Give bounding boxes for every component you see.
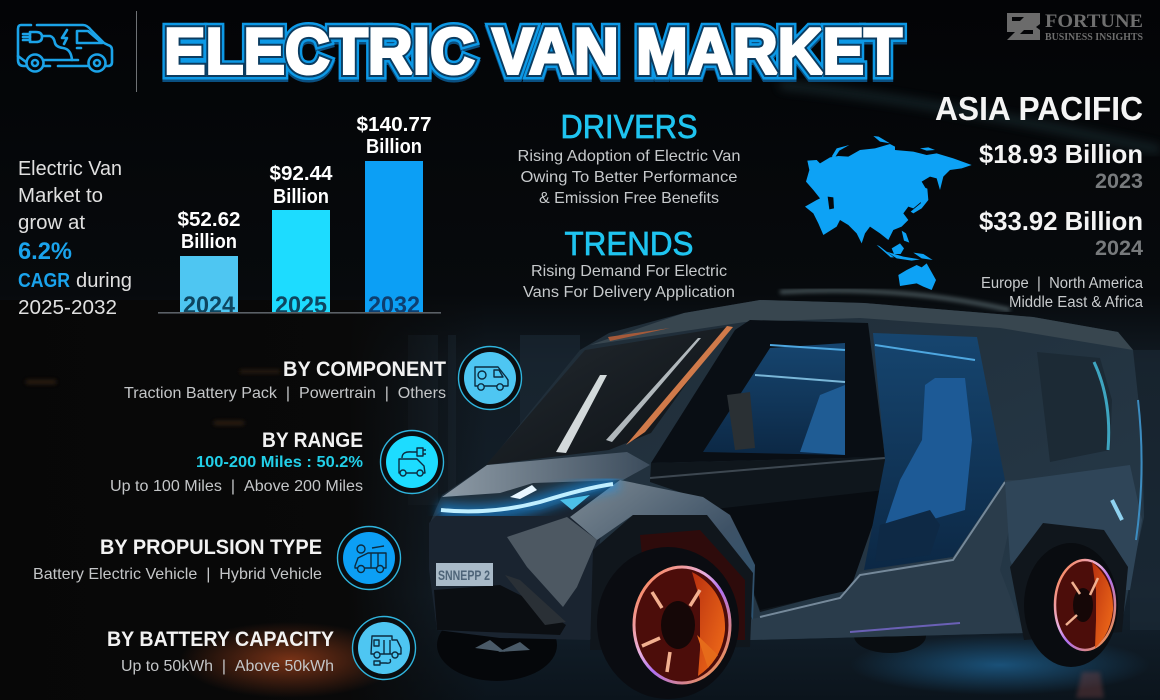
- van body: [429, 300, 1144, 640]
- text block: CAGR statement: grow at: [18, 212, 85, 234]
- title: ELECTRIC VAN MARKET: [164, 14, 902, 88]
- rear wheel arch: [1010, 523, 1128, 640]
- icon: battery capacity van badge: [352, 616, 416, 680]
- text block: Asia Pacific values: Europe | North America: [981, 275, 1143, 292]
- text block: trends: Vans For Delivery Application: [523, 284, 735, 301]
- text block: Asia Pacific values: 2023: [1095, 170, 1143, 193]
- headlight strip: [438, 482, 618, 513]
- bar 2032: 2032: [368, 292, 420, 319]
- bar 2032: Billion: [366, 136, 422, 158]
- bar 2025: [270, 163, 333, 319]
- text block: Asia Pacific values: Middle East & Africa: [1009, 294, 1143, 311]
- text block: Asia Pacific values: ASIA PACIFIC: [935, 90, 1143, 127]
- segment: by component: BY COMPONENT: [283, 358, 446, 381]
- bar 2024: $52.62: [178, 209, 240, 231]
- text block: drivers: Owing To Better Performance: [520, 169, 738, 186]
- bar 2032: $140.77: [356, 114, 432, 136]
- text block: Asia Pacific values: $33.92 Billion: [979, 206, 1143, 236]
- title: ELECTRIC VAN MARKET: [164, 14, 902, 88]
- fender: [570, 480, 755, 620]
- segment: by propulsion type: BY PROPULSION TYPE: [100, 536, 322, 559]
- segment: by range: BY RANGE: [262, 429, 363, 452]
- logo: Fortune Business Insights: FORTUNE: [1045, 11, 1143, 32]
- icon: propulsion van badge: [338, 526, 400, 590]
- icon: range van plug badge: [380, 430, 444, 494]
- bar 2024: Billion: [181, 231, 237, 253]
- segment: by component: [124, 358, 446, 402]
- segment: by battery capacity: Up to 50kWh | Above 50kWh: [121, 658, 334, 675]
- rear lower panel: [1005, 465, 1142, 590]
- icon: electric van outline: [18, 25, 112, 72]
- floor reflection: [1076, 672, 1104, 698]
- bar 2024: [178, 209, 240, 319]
- text block: drivers: & Emission Free Benefits: [539, 190, 719, 207]
- icon: component van badge: [458, 346, 522, 410]
- text block: CAGR statement: Market to: [18, 185, 103, 207]
- bar 2025: $92.44: [270, 163, 333, 185]
- logo: Fortune Business Insights: [1007, 11, 1143, 43]
- bar 2024: 2024: [183, 292, 236, 319]
- text block: Asia Pacific values: $18.93 Billion: [979, 139, 1143, 169]
- lower grille: [434, 585, 566, 635]
- far-side wheels: [437, 609, 557, 681]
- text block: CAGR statement: during: [76, 270, 132, 292]
- segment: by propulsion type: [33, 536, 322, 583]
- text block: Asia Pacific values: [935, 90, 1143, 311]
- segment: by range: [110, 429, 363, 495]
- text block: trends: TRENDS: [564, 225, 694, 262]
- rear panel window: [1037, 352, 1112, 462]
- text block: CAGR statement: 6.2%: [18, 238, 72, 265]
- segment: by component: Traction Battery Pack | Powertrain | Others: [124, 385, 446, 402]
- side mirror: [727, 392, 755, 450]
- bar 2025: 2025: [275, 292, 327, 319]
- map: Asia Pacific: [805, 136, 972, 290]
- segment: by range: 100-200 Miles : 50.2%: [196, 454, 363, 471]
- logo: Fortune Business Insights: BUSINESS INSIGHTS: [1045, 32, 1143, 43]
- text block: drivers: Rising Adoption of Electric Van: [518, 148, 740, 165]
- text block: CAGR statement: 2025-2032: [18, 297, 117, 319]
- text block: trends: [523, 225, 735, 301]
- number plate: [436, 563, 493, 586]
- roof highlight: [590, 300, 1133, 350]
- text block: drivers: [518, 108, 740, 207]
- bar chart: market size: [158, 114, 441, 319]
- segment: by range: Up to 100 Miles | Above 200 Miles: [110, 478, 363, 495]
- text block: Asia Pacific values: 2024: [1095, 237, 1143, 260]
- segment: by propulsion type: Battery Electric Vehicle | Hybrid Vehicle: [33, 566, 322, 583]
- hood: [442, 452, 650, 497]
- title: ELECTRIC VAN MARKET: [164, 17, 902, 90]
- grey bumper panel: [507, 517, 597, 607]
- text block: CAGR statement: Electric Van: [18, 158, 122, 180]
- divider: [136, 11, 137, 92]
- windshield: [486, 327, 727, 465]
- segment: by battery capacity: [107, 628, 334, 675]
- segment: by battery capacity: BY BATTERY CAPACITY: [107, 628, 334, 651]
- bar 2025: Billion: [273, 186, 329, 208]
- electric van photograph illustration: [429, 300, 1144, 699]
- rear wheel: [1024, 543, 1118, 667]
- front wheel: [597, 547, 739, 699]
- front fascia: [429, 482, 623, 640]
- number plate: SNNEPP 2: [438, 567, 490, 583]
- door opening and seat: [864, 333, 1005, 570]
- text block: CAGR statement: [18, 158, 132, 319]
- front wheel arch: [590, 515, 753, 650]
- bar 2032: [356, 114, 432, 319]
- title: ELECTRIC VAN MARKET: [164, 14, 902, 88]
- door panel: [650, 457, 885, 612]
- text block: trends: Rising Demand For Electric: [531, 263, 727, 280]
- text block: CAGR statement: CAGR: [18, 270, 70, 292]
- sill and lower body: [738, 480, 1024, 640]
- door frame and front window: [651, 320, 885, 463]
- text block: drivers: DRIVERS: [560, 108, 698, 145]
